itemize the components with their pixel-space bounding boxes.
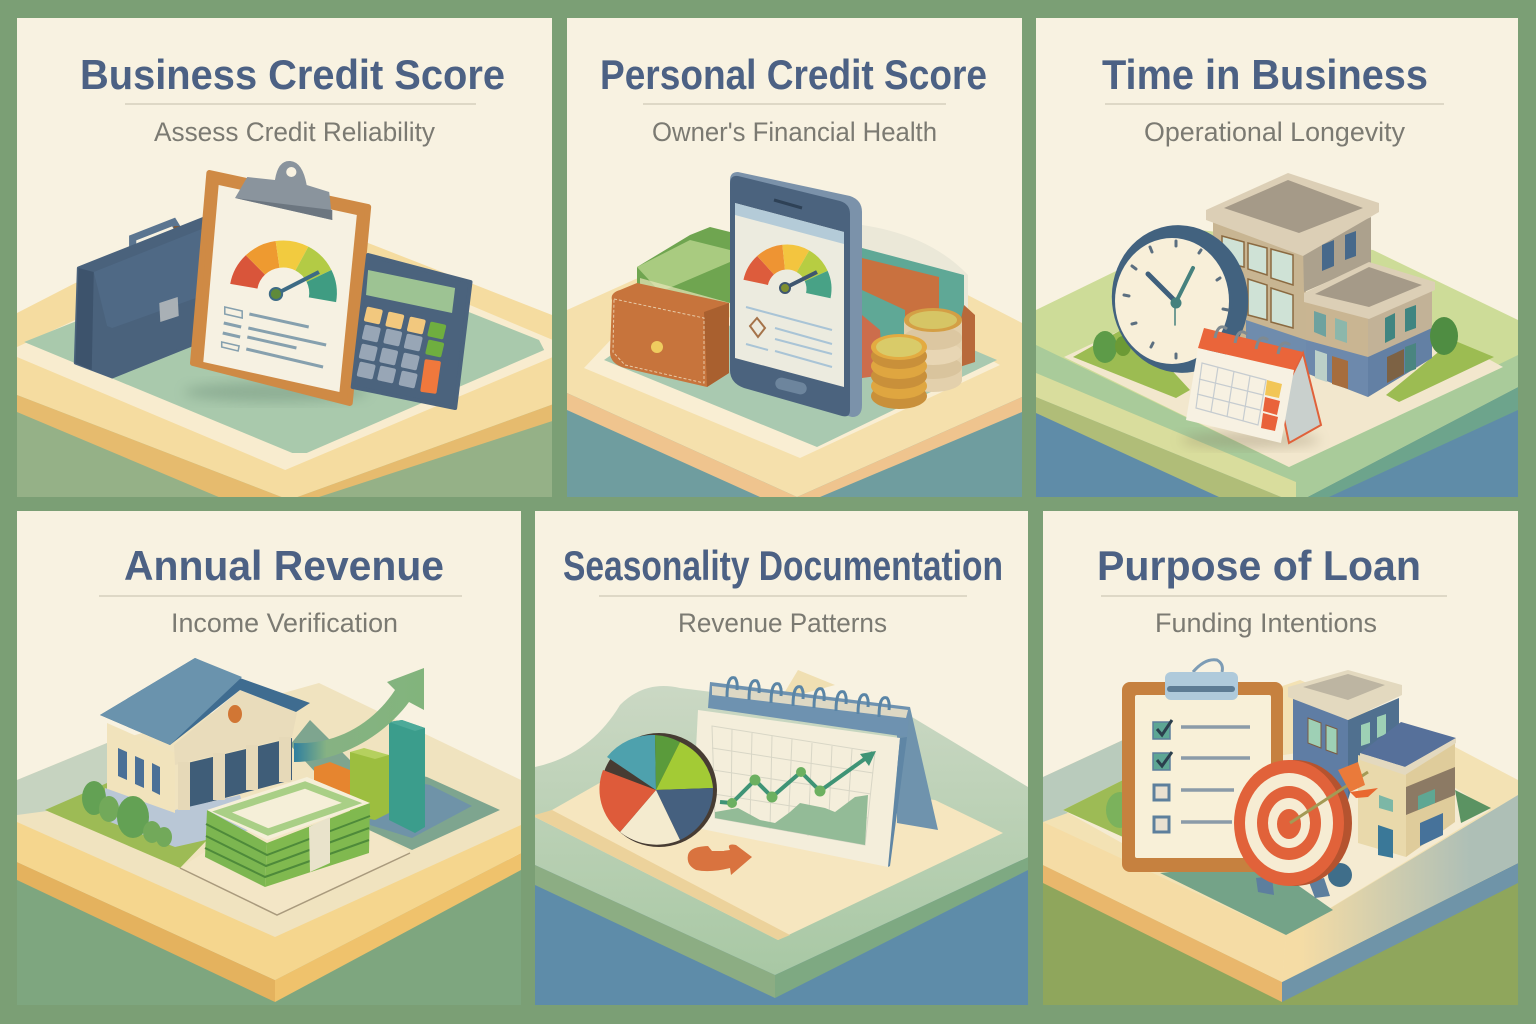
calendar binder rings: [727, 678, 889, 717]
icon: stack of cash: [205, 777, 370, 887]
subtitle: income verification: Income Verification: [171, 608, 398, 638]
title: personal credit score: Personal Credit Score: [600, 51, 987, 98]
subtitle: revenue patterns: Revenue Patterns: [678, 608, 887, 638]
icon: wall clock: [1112, 225, 1248, 373]
side windows: [118, 748, 160, 795]
icon: buildings: [1288, 670, 1456, 858]
title: seasonality documentation: Seasonality Documentation: [563, 542, 1003, 589]
panel: purpose of loan: [1043, 511, 1518, 1005]
isometric platform: [17, 683, 521, 1005]
isometric platform: [1036, 230, 1518, 503]
text lines on phone: [746, 307, 832, 367]
checklist rows: [1153, 720, 1250, 832]
isometric platform: [535, 670, 1028, 1005]
title: business credit score: Business Credit Score: [80, 51, 505, 98]
icon: bank building: [100, 658, 310, 847]
icon: smartphone with credit gauge: [730, 172, 862, 417]
icon: calculator: [353, 255, 470, 408]
chart: personal credit gauge: [744, 244, 832, 298]
icon: briefcase: [75, 218, 204, 377]
icon: desk calendar: [1186, 327, 1321, 443]
chart: credit score gauge: [230, 240, 337, 302]
panel: time in business: [1036, 18, 1518, 503]
icons: shrubs: [1093, 317, 1458, 363]
windows: tall building: [1222, 236, 1293, 328]
illustration: business credit: [17, 161, 565, 500]
title: purpose of loan: Purpose of Loan: [1097, 542, 1421, 589]
subtitle: operational longevity: Operational Longevity: [1144, 117, 1405, 147]
subtitle: owner's financial health: Owner's Financial Health: [652, 117, 937, 147]
icon: open wallet behind phone: [862, 248, 975, 378]
chart: seasonal revenue trend line: [720, 751, 876, 808]
icon: target with arrow: [1234, 760, 1378, 898]
title: annual revenue: Annual Revenue: [124, 542, 444, 589]
icon: office building: [1206, 173, 1435, 397]
icon: orange wallet with cash: [610, 227, 730, 387]
calendar binder rings: [1215, 327, 1290, 354]
panel: annual revenue: [17, 511, 521, 1005]
chart grid: [712, 726, 875, 845]
icon: coin stacks: [871, 308, 962, 409]
chart: pie chart: [599, 733, 717, 847]
icon: clipboard with credit gauge: [193, 161, 368, 403]
icon: bar chart with growth arrow: [294, 668, 425, 833]
panel: personal credit score: [567, 18, 1022, 497]
chart: seasonal revenue area: [715, 795, 868, 845]
isometric platform: [1043, 680, 1518, 1005]
title: time in business: Time in Business: [1102, 51, 1428, 98]
icon: checklist clipboard: [1122, 660, 1283, 872]
icon: orange cycle arrow: [688, 845, 752, 875]
subtitle: assess credit reliability: Assess Credit Reliability: [154, 117, 435, 147]
isometric platform: [567, 225, 1022, 497]
icon: shrub: [1106, 792, 1134, 828]
columns: [178, 737, 291, 810]
panel: business credit score: [17, 18, 565, 500]
isometric platform: [17, 240, 565, 500]
text lines on form: [222, 307, 326, 367]
panel: seasonality documentation: [535, 511, 1028, 1005]
icon: spiral desk calendar with line chart: [692, 678, 938, 867]
subtitle: funding intentions: Funding Intentions: [1155, 608, 1377, 638]
icons: trees: [82, 781, 172, 847]
